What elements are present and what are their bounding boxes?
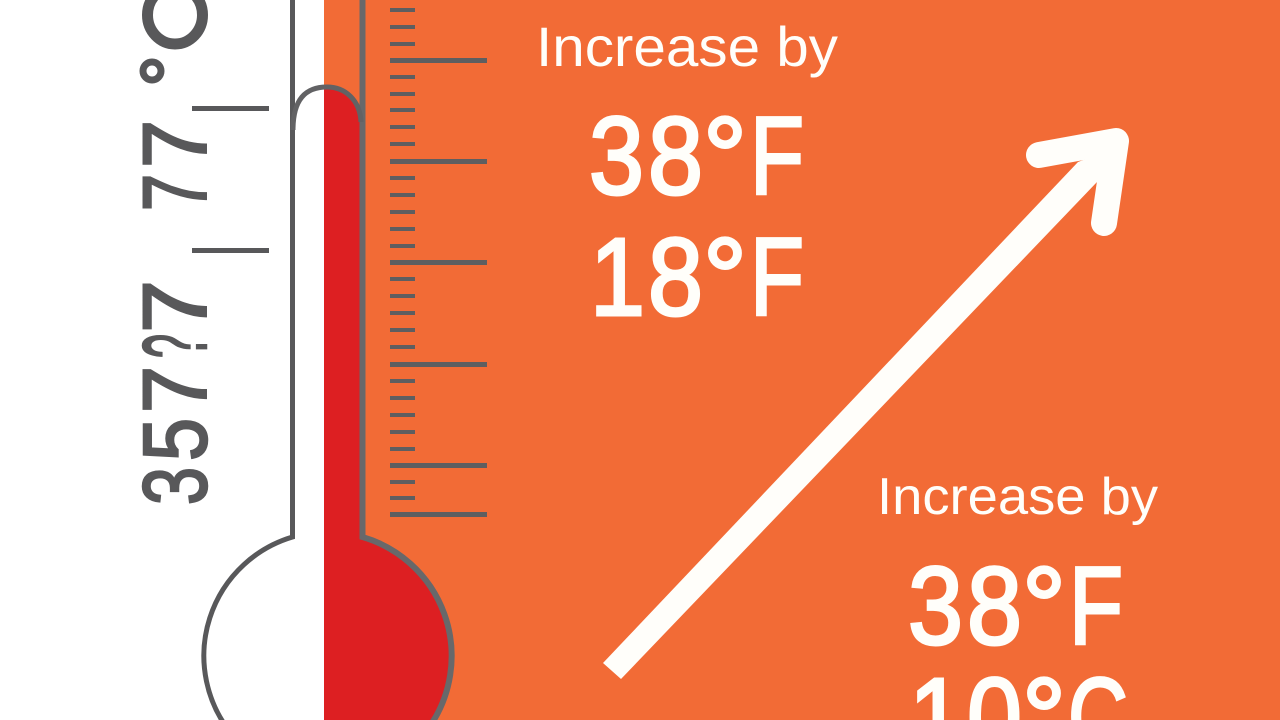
left scale marks: [192, 106, 269, 253]
rotated temperature label: 7: [126, 366, 226, 413]
panel: orange background: [324, 0, 1280, 720]
upper increase text block: °: [703, 216, 747, 339]
lower increase text block: 3: [908, 545, 963, 668]
thermometer outline: [204, 0, 452, 720]
rotated temperature label: [126, 0, 226, 505]
upper increase text block: F: [750, 216, 804, 339]
thermometer: [204, 0, 452, 720]
rotated temperature label: ?: [126, 334, 226, 358]
rotated temperature label: 7: [126, 120, 226, 168]
upper increase text block: 8: [648, 216, 703, 339]
lower increase text block: Increase by: [877, 468, 1158, 526]
upper increase text block: 3: [589, 95, 644, 218]
mercury red fill: [324, 88, 450, 720]
rotated temperature label: 7: [126, 174, 226, 211]
right scale ticks: [390, 8, 487, 517]
upper increase text block: °: [703, 95, 747, 218]
rotated temperature label: 5: [126, 418, 226, 461]
lower increase text block: 8: [967, 545, 1022, 668]
lower increase text block: °: [1022, 545, 1066, 668]
rotated temperature label: 7: [126, 280, 226, 333]
upper increase text block: F: [750, 95, 804, 218]
upper increase text block: [536, 15, 838, 339]
upper increase text block: 1: [590, 216, 645, 339]
lower increase text block: F: [1069, 545, 1123, 668]
upper increase text block: Increase by: [536, 15, 838, 78]
upper increase text block: 8: [648, 95, 703, 218]
arrow: [603, 141, 1116, 679]
lower increase text block: [877, 468, 1158, 720]
rotated temperature label: 3: [126, 467, 226, 505]
